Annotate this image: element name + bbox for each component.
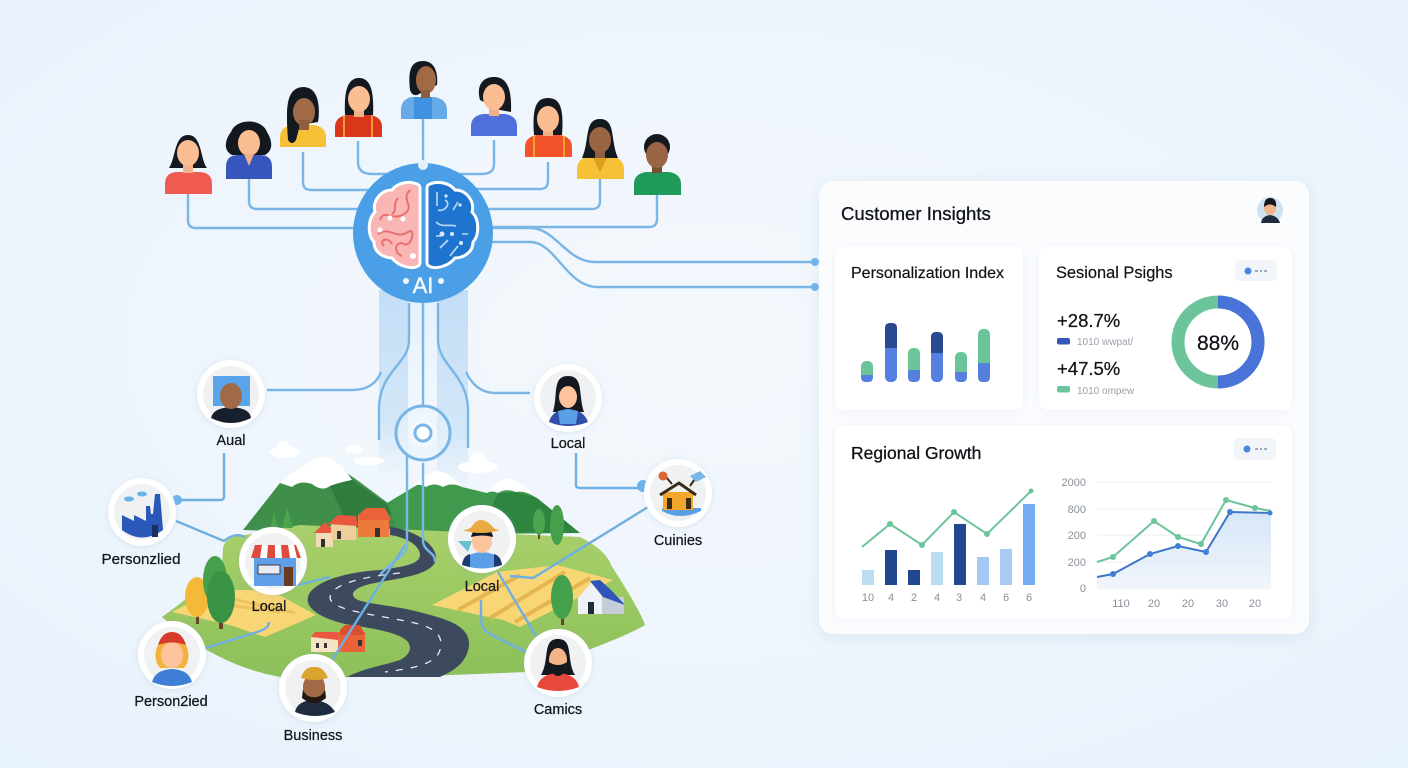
bar and line chart: 10 [862,592,874,604]
line chart: 0 [1080,583,1086,595]
bar and line chart: 3 [956,592,962,604]
avatar 5 [401,61,447,119]
central ring node [396,406,450,460]
metric 2: 1010 ompew [1077,386,1135,397]
avatar 6 [471,77,517,136]
node: Cuinies: Cuinies [654,533,702,549]
metric 1: +28.7% [1057,310,1120,331]
line chart: 20 [1249,598,1261,610]
node: Camics [524,629,592,718]
avatar 3 [280,87,326,147]
avatar 2 [226,122,272,179]
line chart: 800 [1068,504,1086,516]
node: Local right [534,364,602,452]
clouds [270,441,498,473]
road [308,527,469,677]
bar and line chart: 4 [934,592,940,604]
node: factory: Personzlied [102,552,180,568]
node: store [239,527,307,615]
hill [162,525,645,677]
node: Cuinies [644,459,712,549]
bar and line chart: 4 [980,592,986,604]
card: Sesional Insights: Sesional Psighs [1056,264,1173,282]
stacked bar chart [861,323,990,382]
avatar 4 [335,78,382,137]
metric 2 [1057,358,1135,397]
avatar 8 [577,119,624,179]
filter chip [1235,260,1277,281]
card: Regional Growth [835,425,1292,619]
light beams below AI hub [379,290,468,495]
brain left half [369,182,420,268]
donut chart: 88% [1197,332,1239,355]
line chart: 200 [1068,530,1086,542]
card: Personalization Index [835,247,1023,410]
fields [172,590,316,637]
mountains [243,456,400,535]
bar and line chart [862,488,1035,604]
dashboard title: Customer Insights [841,203,991,224]
trees [185,505,573,629]
metric 2: +47.5% [1057,358,1120,379]
connector lines between local nodes [172,453,649,660]
bar and line chart: 6 [1003,592,1009,604]
card: Personalization Index: Personalization Index [851,265,1004,282]
line chart: 110 [1112,598,1130,610]
landscape [162,441,645,677]
icon: profile avatar [1257,197,1283,223]
line chart: 30 [1216,598,1228,610]
panel: Customer Insights dashboard [819,181,1309,634]
connector lines below AI hub [267,303,530,575]
customer avatars row [165,61,681,195]
bar and line chart: 2 [911,592,917,604]
node: Camics: Camics [534,702,582,718]
houses [311,508,625,652]
node: person with red hat [134,621,208,710]
node: factory [102,478,180,568]
AI brain hub [353,160,493,303]
avatar 7 [525,98,572,157]
AI label: AI [413,273,433,298]
metric 1 [1057,310,1133,348]
line chart: 20 [1148,598,1160,610]
card: Regional Growth: Regional Growth [851,443,981,463]
node: Local right: Local [551,436,585,452]
line chart: 2000 [1062,477,1086,489]
card: Sesional Insights [1039,247,1292,410]
line chart: 200 [1068,557,1086,569]
node: farmer [448,505,516,595]
node: store: Local [252,599,286,615]
brain right half [427,182,478,268]
node: Aual: Aual [216,433,246,449]
avatar 1 [165,135,212,194]
connector lines: AI hub to dashboard [492,228,819,291]
node: person with red hat: Person2ied [134,694,208,710]
line chart [1062,477,1272,610]
donut chart [1178,302,1258,382]
connector lines: customers to AI hub [188,119,657,228]
node: business: Business [284,728,342,744]
node: business [279,654,347,744]
node: Aual [197,360,265,449]
bar and line chart: 6 [1026,592,1032,604]
avatar 9 [634,134,681,195]
node: farmer: Local [465,579,499,595]
line chart: 20 [1182,598,1194,610]
filter chip [1234,438,1276,460]
bar and line chart: 4 [888,592,894,604]
metric 1: 1010 wwpat/ [1077,337,1133,348]
